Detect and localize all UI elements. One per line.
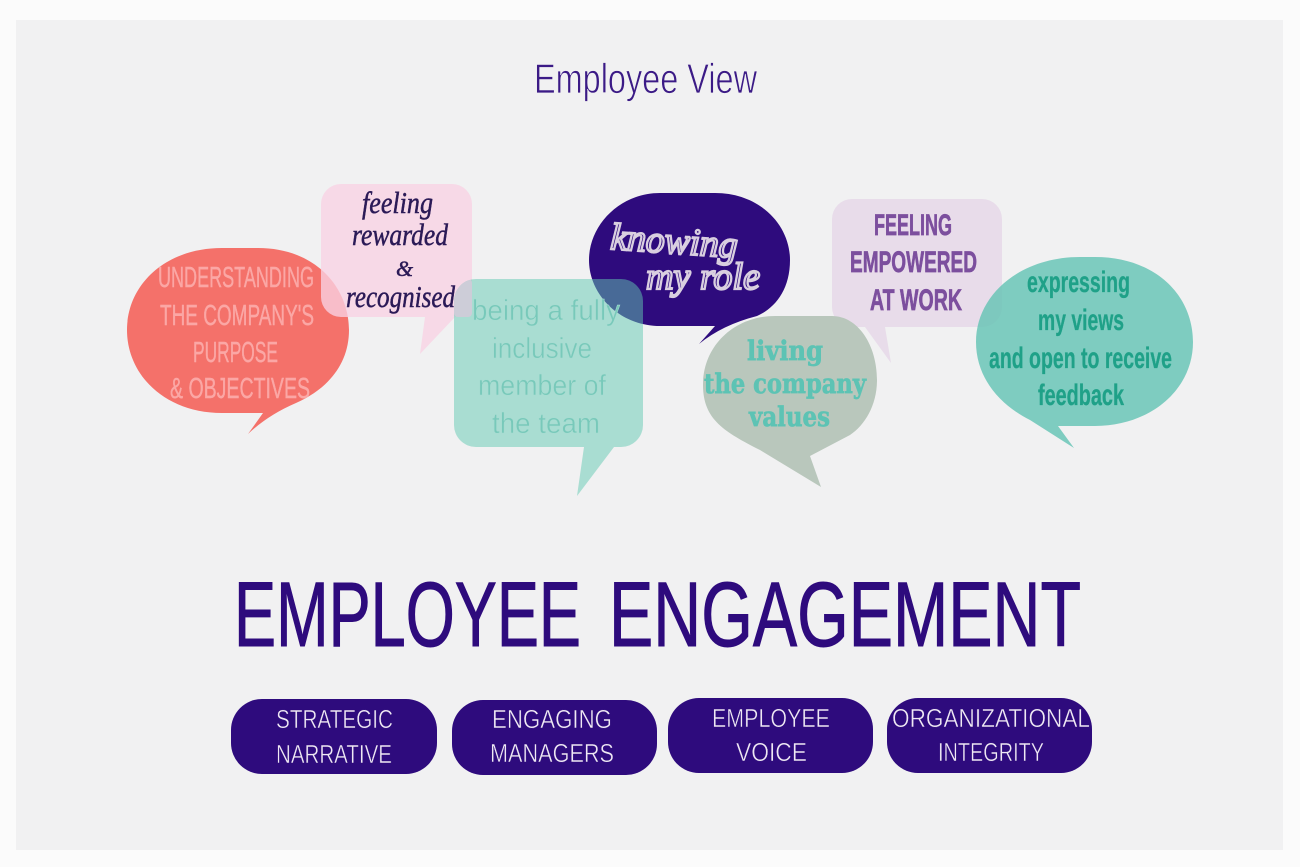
bubble text: being a fully inclusive member of the team: being a fully: [472, 295, 620, 327]
pill: strategic narrative: NARRATIVE: [276, 739, 392, 769]
bubble text: living the company values: living: [747, 336, 823, 367]
bubble text: feeling rewarded and recognised: recognised: [346, 279, 455, 314]
bubble text: understanding the company's purpose and objectives: PURPOSE: [193, 337, 278, 369]
bubble text: feeling empowered at work: [850, 209, 977, 317]
pill: engaging managers: MANAGERS: [490, 738, 614, 768]
bubble text: understanding the company's purpose and objectives: & OBJECTIVES: [170, 373, 310, 405]
bubble text: being a fully inclusive member of the team: member of: [478, 370, 607, 402]
bubble text: being a fully inclusive member of the team: [472, 295, 620, 440]
pill: employee voice: EMPLOYEE: [712, 703, 830, 733]
bubble text: expressing my views and open to receive feedback: [989, 266, 1172, 412]
pill: employee voice: [668, 698, 873, 773]
pill: engaging managers: ENGAGING: [492, 704, 612, 734]
main heading: employee engagement: ENGAGEMENT: [609, 564, 1081, 666]
pill: organizational integrity: ORGANIZATIONAL: [892, 703, 1090, 733]
main heading: employee engagement: [234, 564, 1081, 666]
speech bubble shape: teal: [976, 257, 1193, 448]
bubble text: living the company values: the company: [704, 369, 867, 400]
pill: strategic narrative: STRATEGIC: [276, 704, 393, 734]
bubble text: feeling empowered at work: EMPOWERED: [850, 246, 977, 279]
bubble text: understanding the company's purpose and objectives: UNDERSTANDING: [158, 262, 314, 294]
pill: strategic narrative: [231, 699, 437, 774]
bubble text: knowing my role: my role: [646, 256, 760, 298]
bubble text: feeling empowered at work: AT WORK: [870, 284, 962, 317]
title: Employee View: Employee View: [534, 55, 758, 102]
bubble text: feeling rewarded and recognised: feeling: [362, 185, 433, 220]
bubble text: feeling rewarded and recognised: [346, 185, 455, 314]
pill: organizational integrity: [887, 698, 1092, 773]
bubble text: feeling rewarded and recognised: &: [396, 256, 414, 281]
bubble text: knowing my role: knowing: [609, 216, 739, 267]
pill: engaging managers: [452, 700, 657, 775]
speech bubble shape: coral: [127, 248, 349, 434]
speech bubble shape: lavender: [832, 199, 1002, 363]
bubble text: expressing my views and open to receive feedback: and open to receive: [989, 342, 1172, 375]
bubble text: knowing my role: [609, 216, 760, 298]
bubble text: expressing my views and open to receive feedback: expressing: [1027, 266, 1130, 299]
bubble text: being a fully inclusive member of the team: the team: [492, 408, 600, 440]
bubble text: being a fully inclusive member of the team: inclusive: [492, 333, 592, 365]
pill: organizational integrity: INTEGRITY: [938, 737, 1044, 767]
bubble text: expressing my views and open to receive feedback: my views: [1038, 304, 1124, 337]
speech bubble shape: sage: [703, 316, 877, 487]
speech bubble shape: dark purple: [589, 193, 790, 344]
overlap: pink and light teal: [454, 279, 472, 317]
pill: employee voice: VOICE: [736, 737, 807, 767]
bubble text: living the company values: values: [748, 402, 830, 433]
main heading: employee engagement: EMPLOYEE: [234, 564, 581, 666]
bubble text: feeling empowered at work: FEELING: [874, 209, 952, 242]
bubble text: understanding the company's purpose and objectives: [158, 262, 314, 405]
bubble text: expressing my views and open to receive feedback: feedback: [1038, 379, 1124, 412]
speech bubble shape: pink: [321, 184, 472, 354]
bubble text: understanding the company's purpose and objectives: THE COMPANY'S: [160, 300, 314, 332]
bubble text: feeling rewarded and recognised: rewarded: [352, 217, 448, 252]
speech bubble shape: light teal: [454, 279, 643, 496]
bubble text: living the company values: [704, 336, 867, 433]
